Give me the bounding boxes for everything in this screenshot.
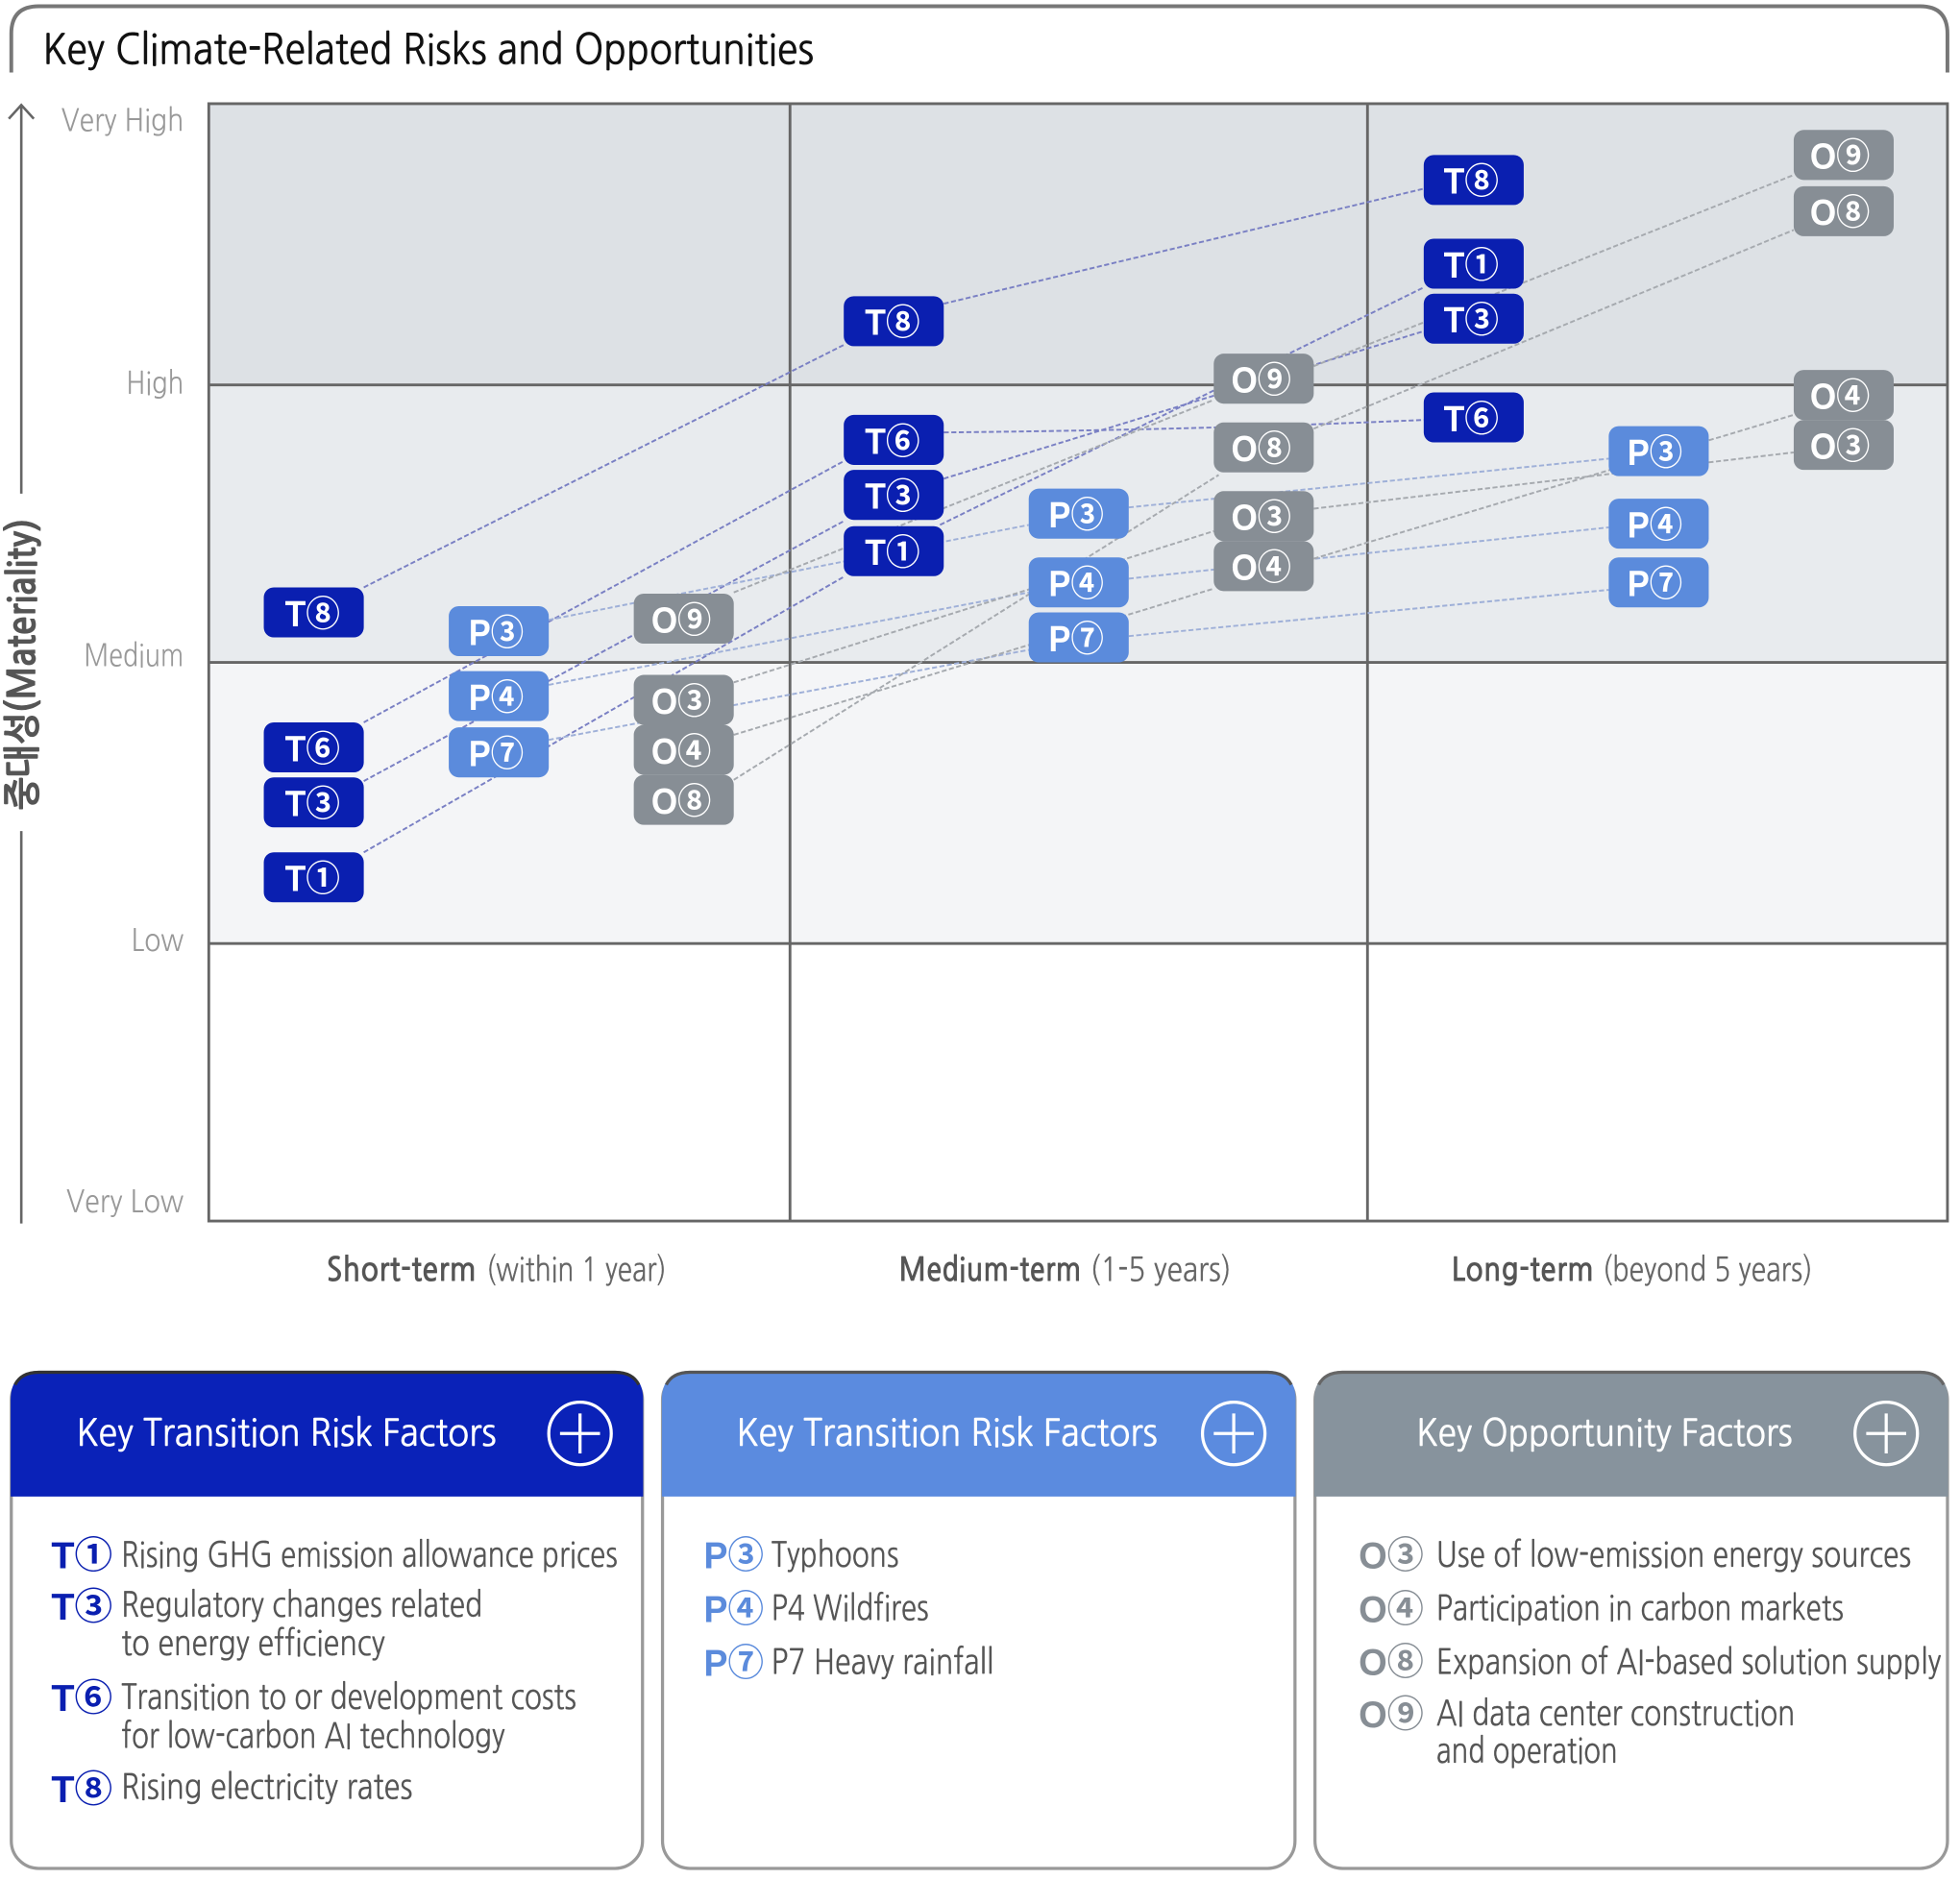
list: opportunities: AI data center construction [1436,1696,1795,1731]
chips: short-term opportunity: O⑨ [651,599,711,640]
chips: long-term physical [1608,427,1708,607]
list: transition risks: Regulatory changes related [121,1588,482,1623]
chips: short-term physical: P⑦ [469,733,524,773]
chips: short-term opportunity: O④ [651,731,711,771]
chips: short-term opportunity: O③ [651,681,711,721]
chips: short-term transition: T⑧ [285,594,340,634]
x axis labels [327,1253,1812,1286]
chips: long-term transition: T① [1444,245,1499,285]
list: physical risks: P4 Wildfires [772,1592,929,1626]
list: opportunities [1359,1536,1942,1769]
chips: medium-term physical: P③ [1049,495,1104,535]
axis level labels [61,105,184,1217]
list: opportunities: and operation [1436,1734,1617,1769]
axis level labels: High [126,367,184,399]
chips: short-term physical: P④ [469,677,524,718]
list: opportunities: O③ [1359,1536,1424,1577]
chips: medium-term transition: T① [865,532,920,573]
chips: medium-term opportunity [1213,354,1313,591]
list: transition risks: Rising GHG emission allowance prices [121,1538,618,1573]
chips: medium-term transition: T③ [865,476,920,516]
chips: short-term transition: T③ [285,784,340,824]
chips: medium-term physical: P⑦ [1049,619,1104,659]
title frame [12,7,1948,72]
chart: materiality by time horizon [208,104,1948,1221]
panel: key transition risk factors [12,1372,643,1868]
title: Key Climate-Related Risks and Opportunities [42,29,814,70]
chips: short-term transition: T⑥ [285,728,340,769]
list: transition risks: T① [51,1536,112,1577]
list: transition risks: Rising electricity rates [121,1770,412,1805]
arrow: materiality axis [9,105,34,1224]
list: transition risks: for low-carbon AI technology [121,1719,505,1753]
list: opportunities: O⑧ [1359,1642,1424,1683]
list: opportunities: O④ [1359,1590,1424,1631]
x axis labels: Short-term [327,1255,477,1286]
chips: long-term transition: T③ [1444,300,1499,340]
axis level labels: Very Low [66,1185,184,1217]
axis level labels: Medium [84,639,184,671]
icon: plus [549,1403,611,1465]
list: physical risks [703,1536,993,1685]
chips: long-term physical: P④ [1628,504,1682,545]
chips: long-term physical: P③ [1628,432,1682,473]
chips: medium-term transition: T⑧ [865,303,920,343]
x axis labels: Long-term [1451,1255,1594,1286]
x axis labels: (beyond 5 years) [1603,1253,1812,1285]
transition risk connectors [364,188,1424,852]
chips: medium-term opportunity: O④ [1231,548,1291,588]
chips: medium-term transition: T⑥ [865,421,920,461]
chips: long-term opportunity: O⑧ [1810,192,1870,232]
chips: long-term opportunity: O③ [1810,426,1870,466]
chips: long-term transition [1424,155,1524,443]
list: physical risks: P7 Heavy rainfall [772,1646,993,1680]
list: opportunities: O⑨ [1359,1695,1424,1736]
list: transition risks [51,1536,618,1811]
chips: long-term transition: T⑧ [1444,161,1499,202]
axis title: 중대성(Materiality) [3,519,40,810]
list: transition risks: to energy efficiency [121,1626,385,1661]
list: transition risks: T③ [51,1587,112,1628]
chips: medium-term transition [844,296,943,576]
heading: Key Opportunity Factors [1416,1414,1793,1452]
chips: long-term transition: T⑥ [1444,399,1499,439]
chips: short-term opportunity [634,594,734,825]
x axis labels: (within 1 year) [486,1253,666,1285]
list: physical risks: P⑦ [703,1644,764,1685]
list: physical risks: P③ [703,1536,764,1577]
panel: key physical risk factors [663,1372,1295,1868]
chips: short-term transition [264,587,364,902]
y axis [3,105,184,1224]
axis level labels: Very High [61,105,184,136]
list: transition risks: T⑧ [51,1769,112,1811]
x axis labels: (1-5 years) [1090,1253,1231,1285]
list: physical risks: Typhoons [772,1538,898,1573]
x axis labels: Medium-term [898,1255,1081,1286]
chips: medium-term opportunity: O③ [1231,498,1291,538]
chips: medium-term opportunity: O⑨ [1231,360,1291,401]
chips: long-term opportunity [1794,130,1894,470]
chips: short-term opportunity: O⑧ [651,781,711,821]
opportunity connectors [734,175,1794,780]
axis level labels: Low [132,924,184,956]
list: transition risks: Transition to or development costs [121,1680,576,1715]
chips: short-term physical [449,606,549,777]
chips: long-term opportunity: O④ [1810,376,1870,416]
icon: plus [1855,1403,1918,1465]
list: opportunities: Participation in carbon markets [1436,1592,1844,1626]
chips: long-term physical: P⑦ [1628,564,1682,604]
heading: Key Transition Risk Factors [76,1414,497,1452]
chips: medium-term opportunity: O⑧ [1231,428,1291,469]
physical risk connectors [549,458,1608,740]
chips: medium-term physical [1029,489,1129,663]
panel: key opportunity factors [1315,1372,1948,1868]
heading: Key Transition Risk Factors [736,1414,1158,1452]
list: physical risks: P④ [703,1590,764,1631]
chips: short-term transition: T① [285,859,340,899]
chips: medium-term physical: P④ [1049,564,1104,604]
icon: plus [1203,1403,1265,1465]
list: transition risks: T⑥ [51,1678,112,1720]
chips: short-term physical: P③ [469,612,524,652]
chips: long-term opportunity: O⑨ [1810,136,1870,177]
